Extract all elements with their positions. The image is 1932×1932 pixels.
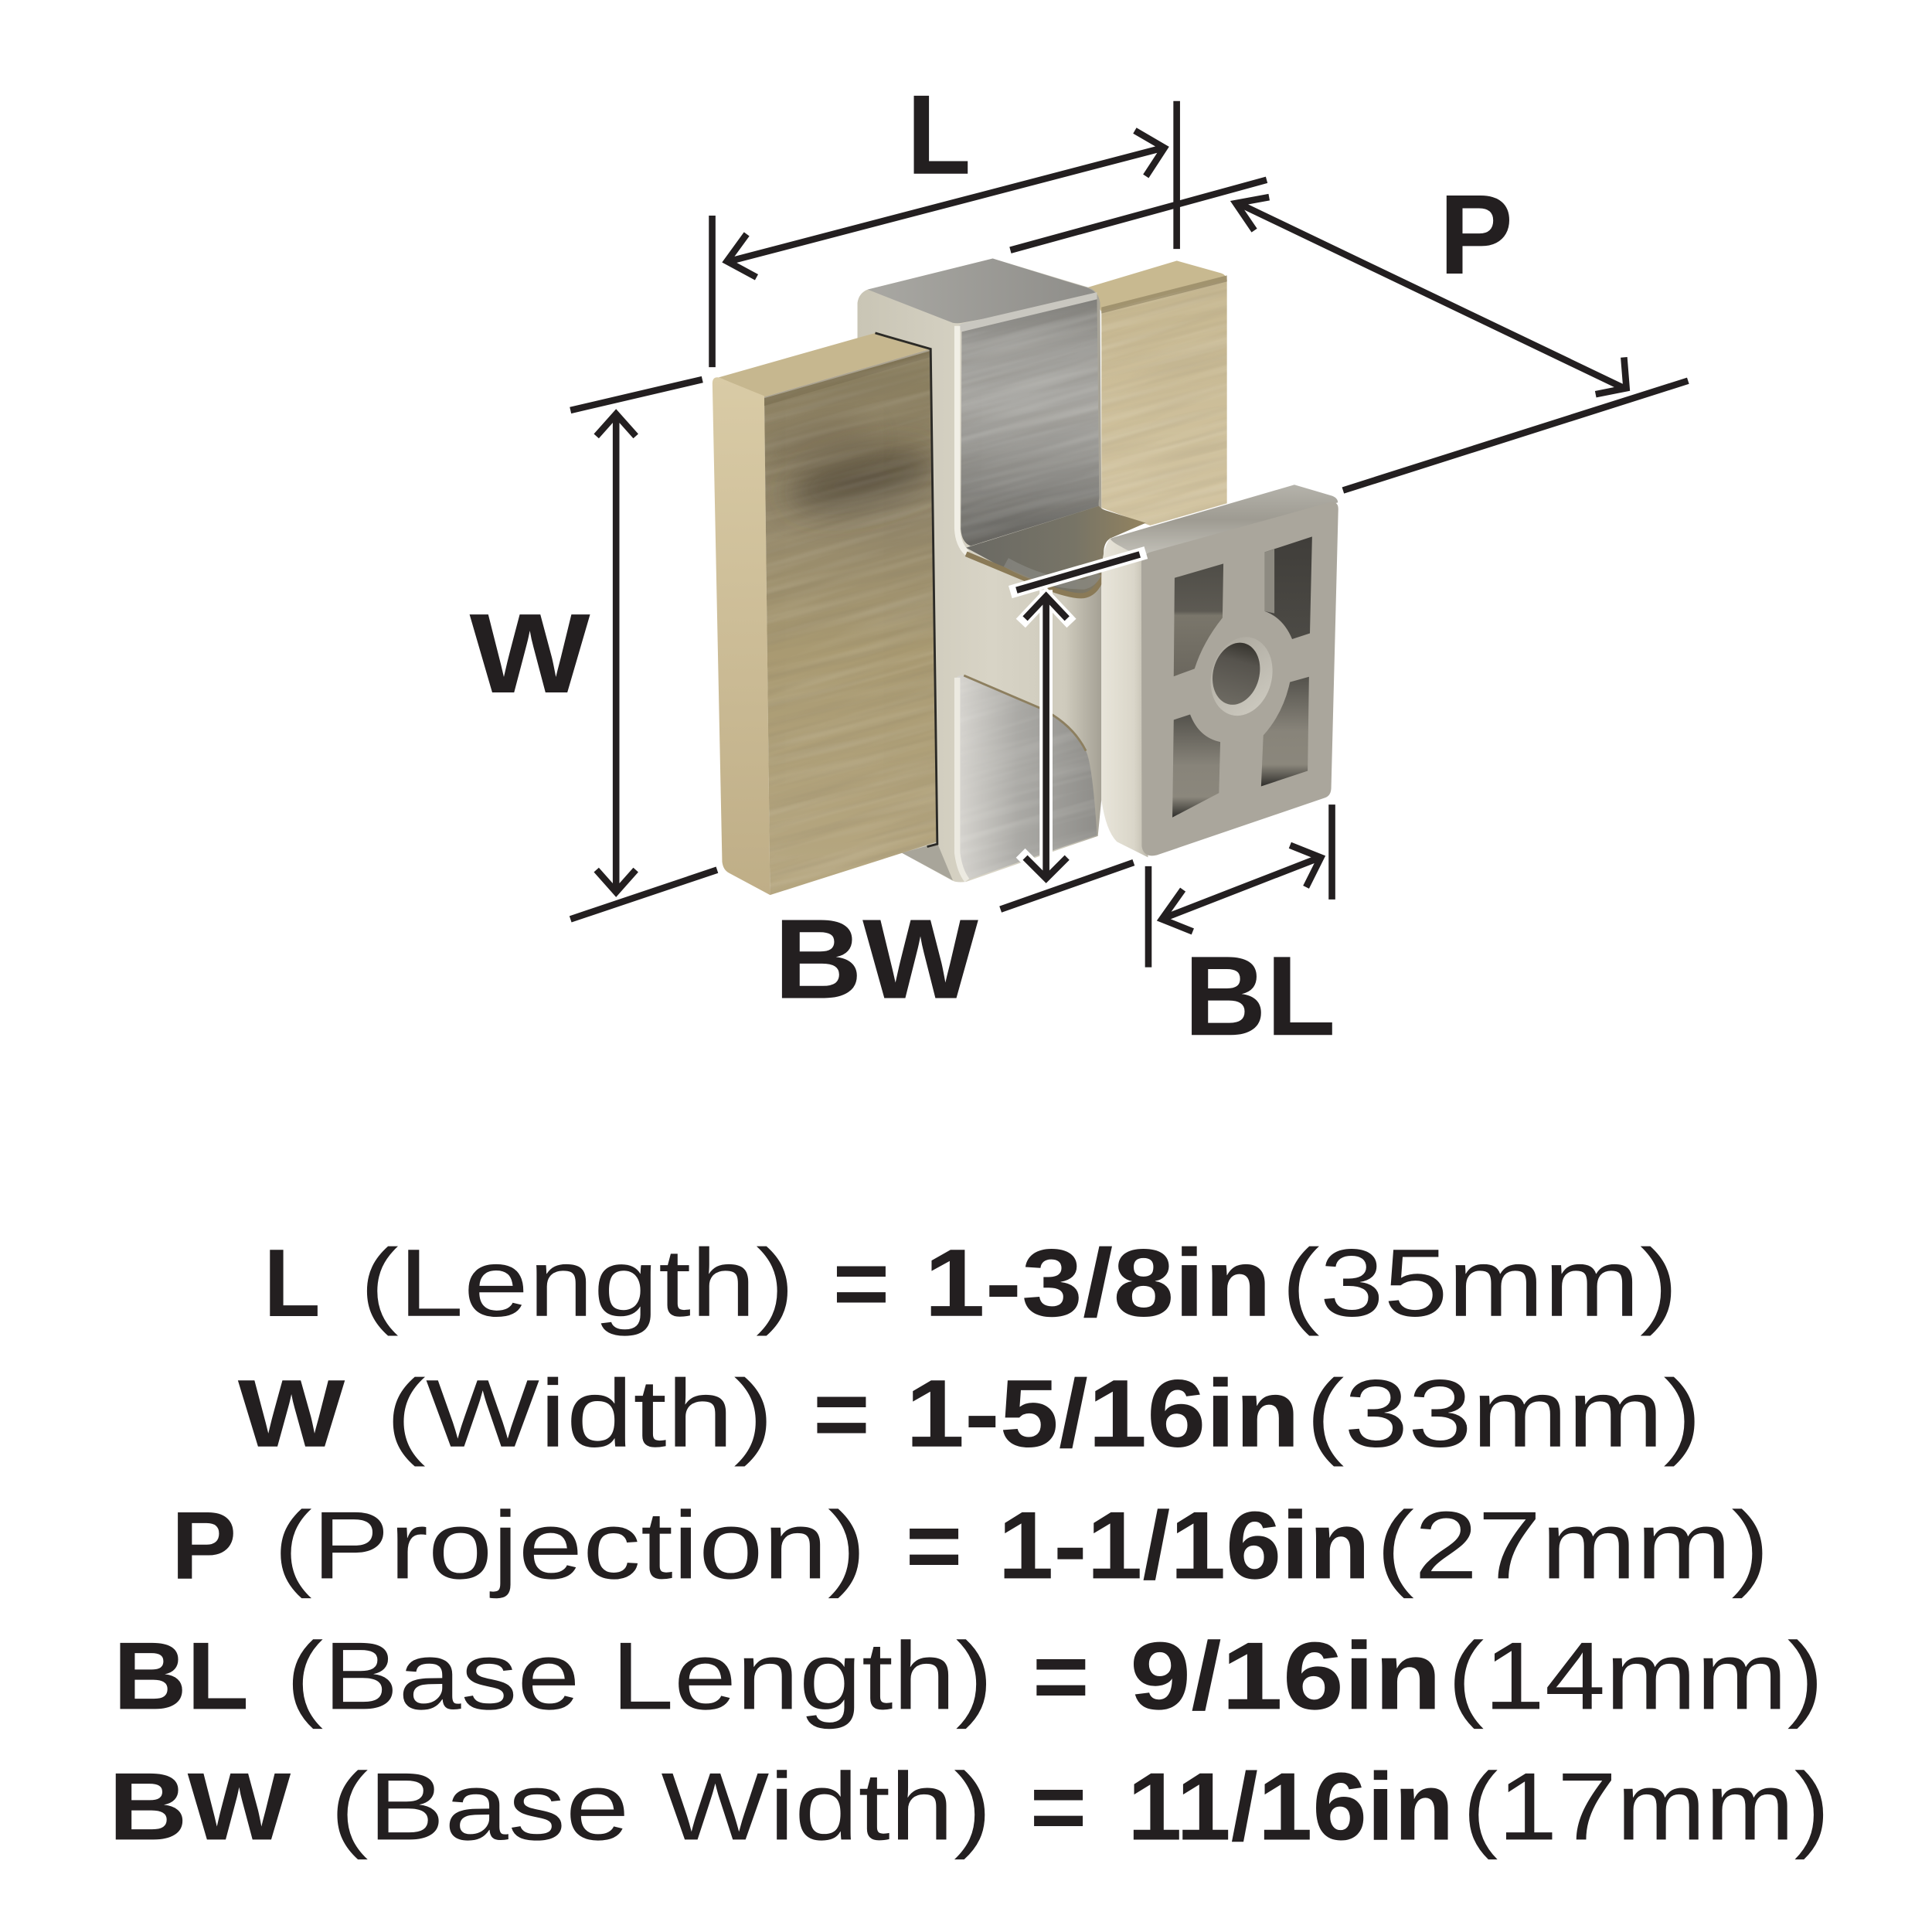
- spec line: base length: (Base Length): [286, 1622, 993, 1730]
- dimension BL: BL: [1184, 933, 1335, 1060]
- dimension BL: [1148, 804, 1335, 1060]
- spec line: length: L: [264, 1230, 321, 1337]
- dimension W: [469, 379, 717, 919]
- spec line: base length: 9/16in: [1130, 1622, 1441, 1730]
- spec line: width: [238, 1360, 1702, 1468]
- product illustration: knob: [617, 233, 1338, 992]
- spec line: width: =: [813, 1360, 870, 1468]
- dimension L: L: [906, 72, 971, 199]
- spec line: length: (Length): [360, 1230, 794, 1337]
- spec line: base length: BL: [114, 1622, 249, 1730]
- dimension L: [713, 72, 1267, 367]
- dimension W: W: [469, 590, 590, 717]
- front plate: [713, 332, 938, 895]
- spec line: projection: (27mm): [1376, 1492, 1770, 1599]
- spec line: length: (35mm): [1281, 1230, 1679, 1337]
- post front face: [954, 292, 1099, 555]
- spec line: base length: (14mm): [1447, 1622, 1824, 1730]
- base block: [1101, 485, 1338, 857]
- lower notch: [902, 674, 1097, 882]
- spec line: base width: BW: [108, 1753, 291, 1860]
- spec line: base length: =: [1032, 1622, 1089, 1730]
- spec line: base width: (Base Width): [330, 1753, 992, 1860]
- ledge: [966, 506, 1146, 596]
- spec line: length: =: [833, 1230, 889, 1337]
- centre post: [858, 258, 1145, 883]
- spec line: base width: =: [1030, 1753, 1087, 1860]
- spec line: projection: [172, 1492, 1770, 1599]
- specification list: [108, 1230, 1830, 1860]
- spec line: width: (Width): [386, 1360, 774, 1468]
- spec line: projection: 1-1/16in: [998, 1492, 1370, 1599]
- spec line: width: W: [238, 1360, 345, 1468]
- base centre hole: [1202, 630, 1281, 723]
- spec line: width: (33mm): [1306, 1360, 1702, 1468]
- spec line: base length: [114, 1622, 1824, 1730]
- spec line: width: 1-5/16in: [906, 1360, 1300, 1468]
- spec line: length: [264, 1230, 1679, 1337]
- dimension BW: BW: [774, 896, 979, 1022]
- base windows: [1172, 536, 1312, 818]
- spec line: length: 1-3/8in: [924, 1230, 1271, 1337]
- dimension P: P: [1439, 172, 1513, 298]
- back plate: [1088, 260, 1227, 526]
- spec line: projection: =: [906, 1492, 962, 1599]
- spec line: base width: (17mm): [1463, 1753, 1830, 1860]
- dark brushed patch: [765, 355, 934, 883]
- spec line: projection: (Projection): [274, 1492, 866, 1599]
- spec line: base width: [108, 1753, 1830, 1860]
- spec line: base width: 11/16in: [1128, 1753, 1454, 1860]
- dimension P: [1236, 172, 1688, 491]
- dimension BW: [774, 554, 1140, 1022]
- spec line: projection: P: [172, 1492, 236, 1599]
- post top face: [868, 259, 1097, 323]
